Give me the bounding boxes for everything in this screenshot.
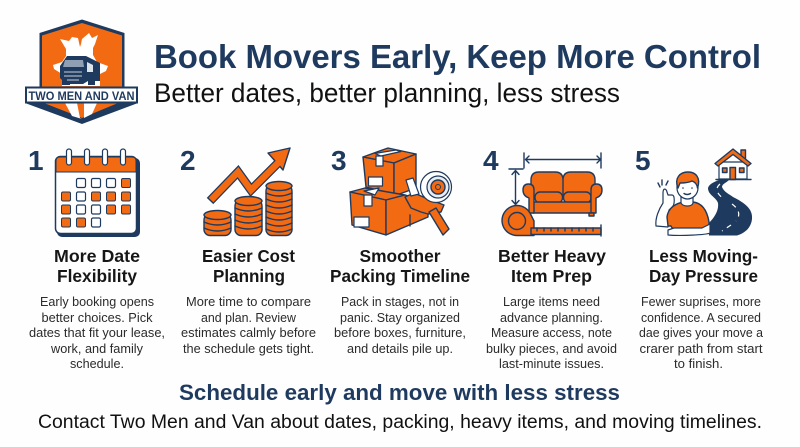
heading: Packing Timeline xyxy=(330,266,470,286)
body text xyxy=(334,295,466,356)
body text: Pack in stages, not in xyxy=(341,295,459,309)
body text: work, and family xyxy=(50,342,144,356)
body text: Fewer suprises, more xyxy=(641,295,761,309)
icon: road to house xyxy=(708,149,752,236)
body text: estimates calmly before xyxy=(181,326,316,340)
heading xyxy=(54,246,140,286)
body text: Large items need xyxy=(503,295,600,309)
body text: confidence. A secured xyxy=(641,311,761,325)
heading xyxy=(202,246,295,286)
heading: More Date xyxy=(54,246,140,266)
heading xyxy=(330,246,470,286)
number 1: 1 xyxy=(28,145,44,176)
body text xyxy=(486,295,617,371)
subtitle: Better dates, better planning, less stress xyxy=(154,78,620,108)
number 5: 5 xyxy=(635,145,651,176)
icon: coins and rising arrow xyxy=(204,148,292,236)
icon: boxes and tape dispenser xyxy=(350,148,452,235)
body text: the schedule gets tight. xyxy=(183,342,314,356)
heading xyxy=(649,246,758,286)
body text xyxy=(639,295,763,371)
body text: better choices. Pick xyxy=(42,311,153,325)
icon: calendar xyxy=(56,149,140,237)
body text: dae gives your move a xyxy=(639,326,763,340)
panel: step 4 better heavy item prep xyxy=(483,145,617,371)
body text: crarer path from start xyxy=(640,342,763,356)
panel: step 1 more date flexibility xyxy=(28,145,165,371)
body text: More time to compare xyxy=(186,295,311,309)
body text: to finish. xyxy=(674,357,723,371)
heading: Day Pressure xyxy=(649,266,758,286)
footer call to action: Contact Two Men and Van about dates, packing, heavy items, and moving timelines. xyxy=(38,412,762,433)
icon: smiling man with thumbs up xyxy=(656,172,710,235)
body text: panic. Stay organized xyxy=(340,311,460,325)
heading xyxy=(498,246,606,286)
number 3: 3 xyxy=(331,145,347,176)
heading: Easier Cost xyxy=(202,246,295,266)
footer heading: Schedule early and move with less stress xyxy=(179,380,620,405)
logo: Two Men and Van badge: TWO MEN AND VAN xyxy=(28,89,134,103)
body text xyxy=(181,295,316,356)
body text: advance planning. xyxy=(500,311,603,325)
heading: Planning xyxy=(213,266,285,286)
van xyxy=(60,56,100,85)
logo: Two Men and Van badge xyxy=(25,20,138,124)
panel: step 3 smoother packing timeline xyxy=(330,145,470,356)
heading: Smoother xyxy=(360,246,441,266)
heading: Less Moving- xyxy=(649,246,758,266)
panel: step 5 less moving-day pressure xyxy=(635,145,763,371)
heading: Better Heavy xyxy=(498,246,606,266)
body text xyxy=(29,295,165,371)
panel: step 2 easier cost planning xyxy=(180,145,316,356)
icon: sofa with tape measure xyxy=(502,153,602,236)
body text: last-minute issues. xyxy=(499,357,604,371)
body text: dates that fit your lease, xyxy=(29,326,165,340)
heading: Flexibility xyxy=(57,266,137,286)
body text: schedule. xyxy=(70,357,124,371)
title: Book Movers Early, Keep More Control xyxy=(154,38,761,75)
body text: Early booking opens xyxy=(40,295,154,309)
body text: bulky pieces, and avoid xyxy=(486,342,617,356)
body text: and plan. Review xyxy=(201,311,297,325)
body text: before boxes, furniture, xyxy=(334,326,466,340)
number 4: 4 xyxy=(483,145,499,176)
number 2: 2 xyxy=(180,145,196,176)
heading: Item Prep xyxy=(511,266,592,286)
body text: Measure access, note xyxy=(491,326,612,340)
body text: and details pile up. xyxy=(347,342,453,356)
